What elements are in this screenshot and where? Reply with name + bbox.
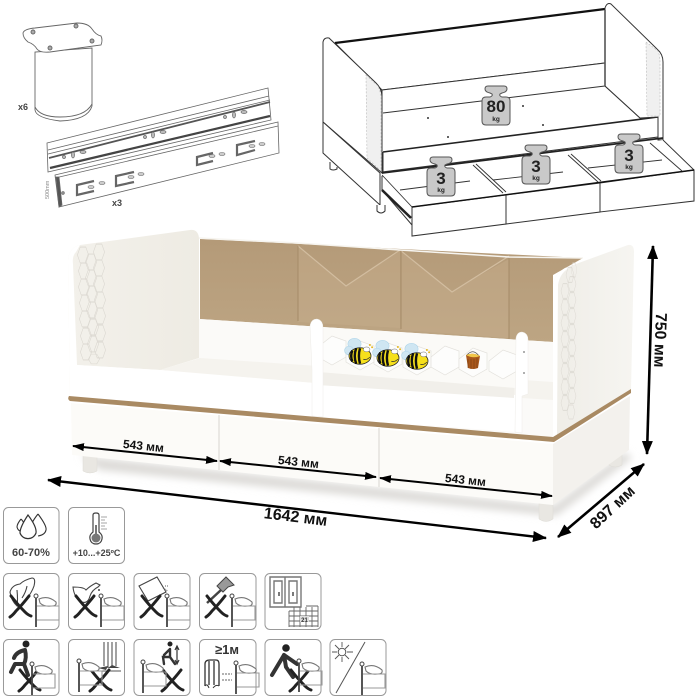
icon: no hammer — [200, 574, 256, 630]
icon: do not drag bed — [265, 640, 322, 696]
back wall below cushions — [199, 319, 553, 440]
mattress screw dots — [427, 105, 544, 138]
bee sticker 3 — [402, 343, 430, 369]
walnut trim strip — [68, 389, 631, 442]
dimension: drawer 543 mm middle — [220, 453, 376, 477]
dimension: depth 897 mm — [558, 464, 644, 537]
icon: keep 1 m from heaters: ≥1м — [215, 642, 239, 657]
quantity label: rails: x3 — [112, 198, 122, 208]
weight: 3 kg drawer left: kg — [437, 187, 445, 194]
left side panel — [68, 230, 199, 397]
rail length label: 500mm — [45, 180, 51, 199]
weight: 3 kg drawer right — [615, 134, 643, 173]
honey bucket sticker — [466, 352, 480, 369]
drawer fronts — [412, 195, 506, 236]
honeycomb left — [77, 244, 106, 364]
weight: 3 kg drawer left: 3 — [436, 169, 446, 188]
icon: no liquids — [68, 574, 124, 630]
furniture leg hardware — [18, 23, 102, 121]
icon: no spray — [134, 574, 190, 630]
weight: 80 kg on bed — [482, 86, 510, 125]
base drawers front — [71, 403, 553, 505]
weight: 80 kg on bed: kg — [492, 116, 500, 123]
drawer interiors — [382, 140, 694, 207]
guard posts — [310, 319, 323, 417]
weight: 3 kg drawer right: kg — [625, 164, 633, 171]
icon: do not sit on edge — [4, 640, 59, 696]
right side panel — [553, 245, 634, 438]
dimension: height 750 mm: 750 мм — [650, 312, 669, 368]
base right side — [553, 396, 630, 505]
weight: 3 kg drawer middle: kg — [532, 175, 540, 182]
weight: 3 kg drawer left — [427, 157, 455, 196]
honeycomb and stickers — [318, 336, 346, 365]
dimension: total length 1642 mm — [48, 480, 546, 538]
dimension: drawer 543 mm left — [73, 437, 217, 461]
icon: no wet cloth — [4, 574, 59, 630]
dimension: total length 1642 mm: 1642 мм — [263, 505, 328, 530]
mattress deck — [160, 358, 553, 400]
dimension: drawer 543 mm middle: 543 мм — [277, 453, 320, 471]
main bed photo render — [68, 230, 634, 522]
weight: 3 kg drawer middle: 3 — [531, 157, 541, 176]
legs — [330, 162, 337, 170]
bee sticker 1 — [345, 338, 373, 364]
quantity label: legs: x6 — [18, 102, 28, 112]
icon: humidity 60-70% — [4, 508, 59, 564]
icon: avoid direct sunlight — [330, 640, 386, 696]
icon: keep 1 m from heaters — [200, 640, 259, 696]
icon: do not stand on bed — [68, 640, 124, 696]
bee sticker 2 — [373, 340, 401, 366]
right side panel — [605, 4, 663, 140]
icon: indoor dry room: 21 — [301, 618, 308, 624]
icon: humidity 60-70%: 60-70% — [12, 547, 50, 559]
honeycomb right — [561, 263, 577, 419]
drawer slide rails — [45, 88, 279, 208]
dimension: drawer 543 mm left: 543 мм — [122, 437, 165, 455]
weight: 3 kg drawer right: 3 — [624, 146, 634, 165]
weight: 3 kg drawer middle — [522, 145, 550, 184]
dimension: depth 897 mm: 897 мм — [587, 483, 639, 533]
left side panel — [323, 38, 382, 173]
back cushions — [200, 239, 583, 342]
icon: temperature range — [68, 508, 124, 564]
floor shadow — [80, 452, 632, 516]
load diagram: bed line drawing — [323, 4, 694, 236]
icon: indoor dry room — [265, 574, 321, 630]
front rail left — [77, 365, 315, 417]
legs — [83, 453, 622, 522]
dimension: drawer 543 mm right — [380, 471, 552, 496]
guard rail panel — [318, 327, 516, 388]
back wall — [335, 9, 605, 90]
icon: temperature range: +10...+25ºC — [73, 548, 121, 558]
weight: 80 kg on bed: 80 — [487, 97, 505, 116]
dimension: height 750 mm — [647, 246, 669, 454]
icon: do not jump on bed — [134, 640, 190, 696]
dimension: drawer 543 mm right: 543 мм — [444, 471, 487, 489]
